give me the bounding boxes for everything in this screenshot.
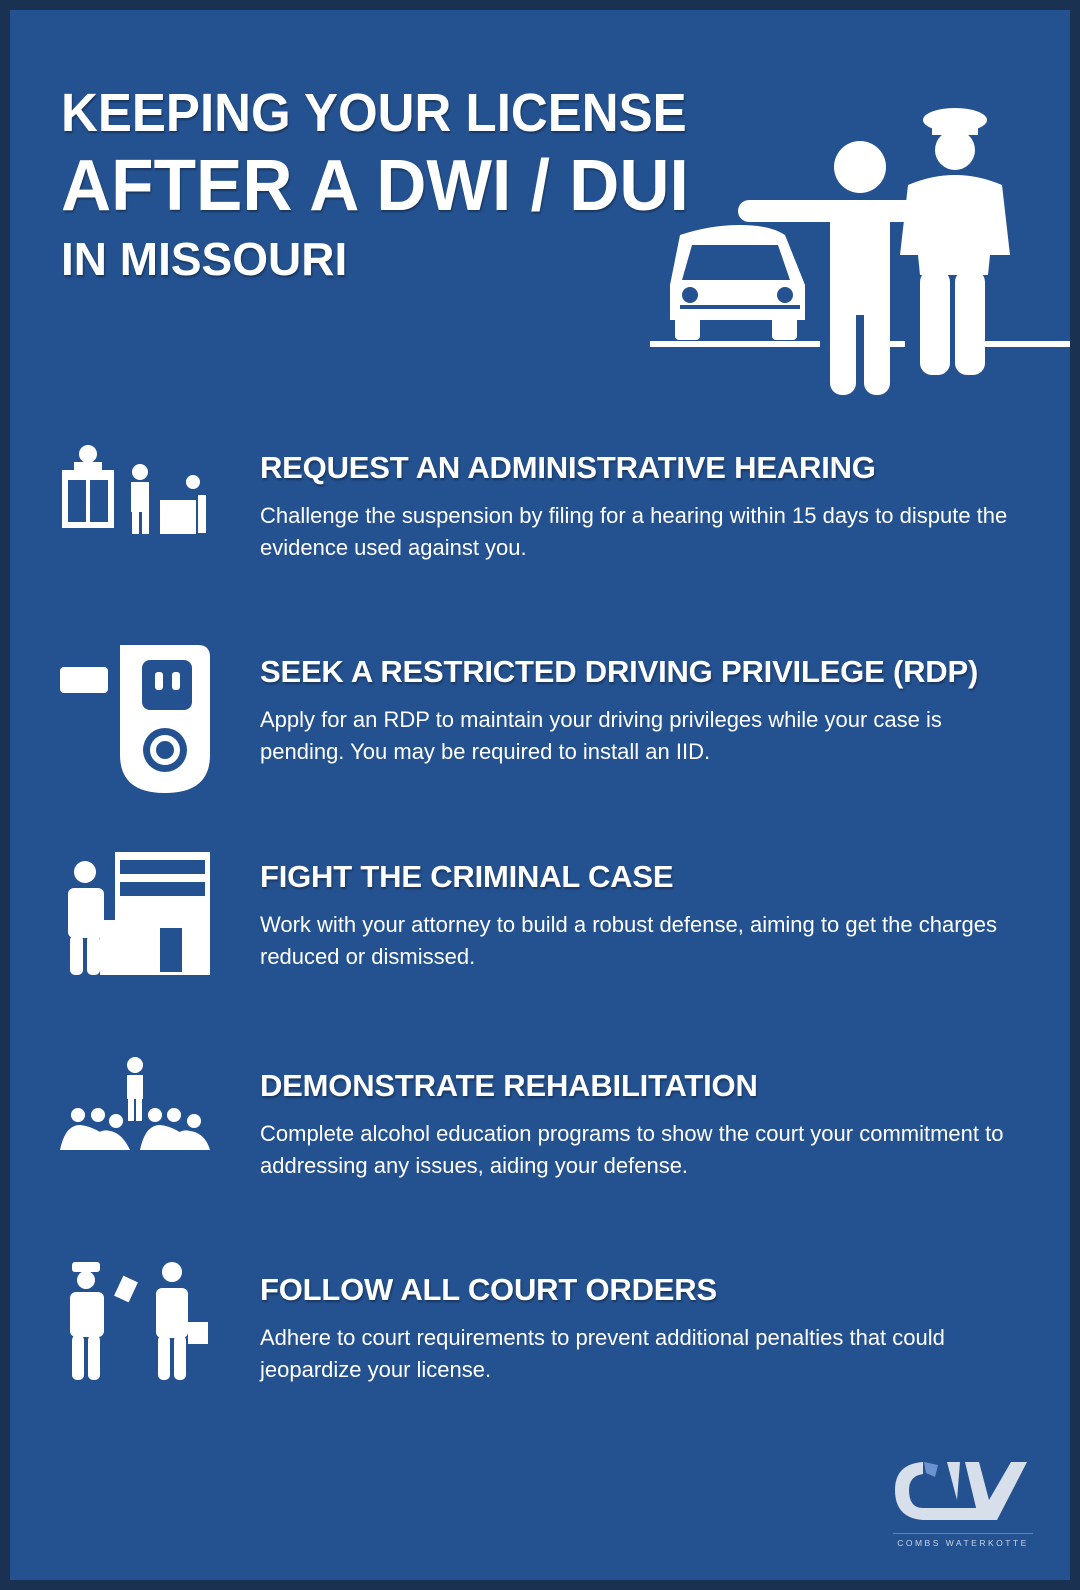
title: KEEPING YOUR LICENSE xyxy=(61,83,687,143)
logo: Combs Waterkotte: COMBS WATERKOTTE xyxy=(897,1538,1029,1548)
section 1 icon: courtroom xyxy=(62,445,206,534)
section 1: Challenge the suspension by filing for a hearing within 15 days to dispute the evidence used against you. xyxy=(260,503,1007,560)
section 4 xyxy=(260,1068,1003,1178)
section 1: REQUEST AN ADMINISTRATIVE HEARING xyxy=(260,450,876,485)
section 4 icon: group with speaker xyxy=(60,1057,210,1150)
section 5: Adhere to court requirements to prevent additional penalties that could jeopardize your license. xyxy=(260,1325,945,1382)
section 2 icon: breathalyzer xyxy=(60,645,210,793)
section 1 xyxy=(260,450,1007,560)
section 5: FOLLOW ALL COURT ORDERS xyxy=(260,1272,717,1307)
hero illustration: car, person, police officer xyxy=(650,108,1070,395)
logo: Combs Waterkotte xyxy=(893,1462,1033,1548)
section 3 icon: attorney office xyxy=(68,852,210,975)
title: IN MISSOURI xyxy=(61,233,347,285)
section 5 xyxy=(259,1272,945,1382)
section 3 xyxy=(260,859,997,969)
section 3: FIGHT THE CRIMINAL CASE xyxy=(260,859,673,894)
section 4: Complete alcohol education programs to show the court your commitment to addressing any issues, aiding your defense. xyxy=(260,1121,1003,1178)
section 2 xyxy=(260,654,979,764)
title xyxy=(61,83,689,285)
section 3: Work with your attorney to build a robust defense, aiming to get the charges reduced or dismissed. xyxy=(260,912,997,969)
section 2: SEEK A RESTRICTED DRIVING PRIVILEGE (RDP) xyxy=(260,654,978,689)
title: AFTER A DWI / DUI xyxy=(61,146,689,226)
section 5 icon: officer and citizen xyxy=(70,1262,208,1380)
section 2: Apply for an RDP to maintain your driving privileges while your case is pending. You may be required to install an IID. xyxy=(260,707,942,764)
section 4: DEMONSTRATE REHABILITATION xyxy=(260,1068,758,1103)
